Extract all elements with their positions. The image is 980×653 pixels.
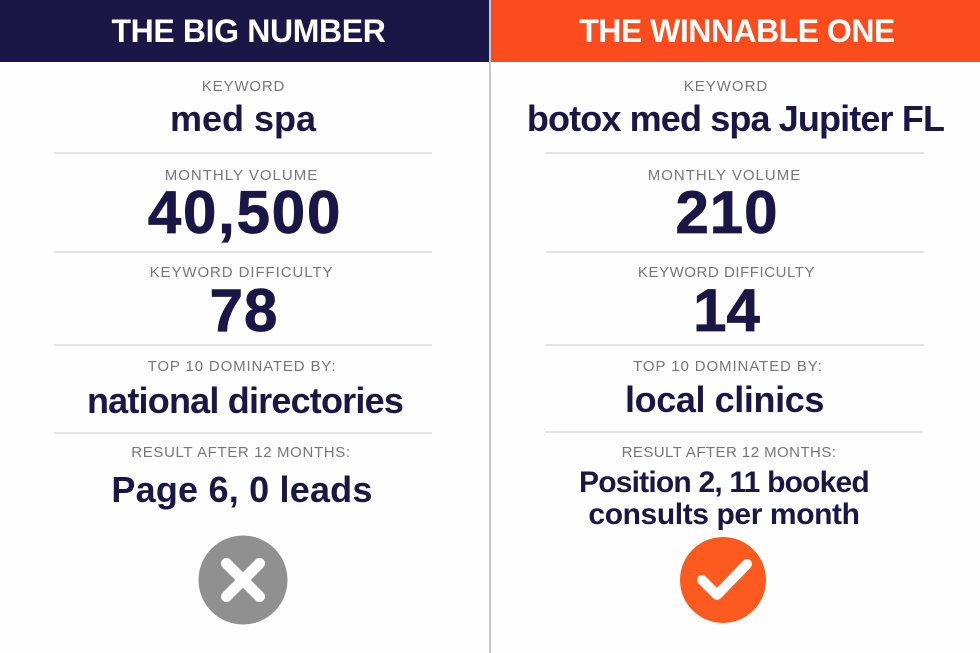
value: 14: 14 bbox=[693, 277, 760, 344]
value: position 2, 11 booked consults per month bbox=[579, 466, 869, 531]
value: position 2, 11 booked consults per month: Position 2, 11 booked bbox=[579, 466, 869, 499]
label: monthly volume: MONTHLY VOLUME bbox=[648, 167, 801, 184]
label: top 10 dominated by: TOP 10 DOMINATED BY: bbox=[148, 358, 336, 375]
icon: grey cross bbox=[198, 536, 288, 624]
panel: the big number bbox=[0, 0, 489, 624]
value: botox med spa jupiter fl: botox med spa Jupiter FL bbox=[527, 98, 944, 139]
value: position 2, 11 booked consults per month: consults per month bbox=[588, 498, 860, 531]
label: keyword: KEYWORD bbox=[202, 78, 285, 95]
heading: the big number: THE BIG NUMBER bbox=[111, 13, 386, 49]
label: keyword difficulty: KEYWORD DIFFICULTY bbox=[638, 264, 815, 281]
value: national directories: national directories bbox=[87, 380, 403, 421]
value: med spa: med spa bbox=[170, 98, 316, 139]
panel divider bbox=[489, 0, 491, 653]
value: 210: 210 bbox=[675, 179, 779, 246]
value: page 6, 0 leads: Page 6, 0 leads bbox=[111, 469, 373, 510]
label: keyword: KEYWORD bbox=[684, 78, 768, 95]
label: keyword difficulty: KEYWORD DIFFICULTY bbox=[150, 264, 333, 281]
value: 78: 78 bbox=[210, 277, 278, 344]
label: monthly volume: MONTHLY VOLUME bbox=[165, 167, 318, 184]
icon: orange check bbox=[680, 537, 766, 623]
panel: the winnable one bbox=[491, 0, 980, 623]
heading: the winnable one bbox=[491, 0, 980, 62]
label: result after 12 months: RESULT AFTER 12 MONTHS: bbox=[622, 444, 836, 461]
heading: the winnable one: THE WINNABLE ONE bbox=[579, 13, 895, 49]
value: 40,500: 40,500 bbox=[148, 179, 342, 246]
heading: the big number bbox=[0, 0, 489, 62]
label: top 10 dominated by: TOP 10 DOMINATED BY: bbox=[633, 358, 823, 375]
label: result after 12 months: RESULT AFTER 12 MONTHS: bbox=[131, 444, 351, 461]
value: local clinics: local clinics bbox=[625, 379, 824, 420]
